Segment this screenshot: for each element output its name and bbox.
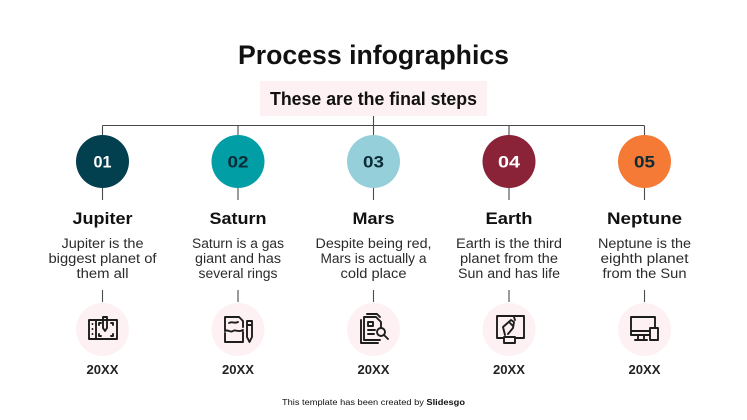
number badge 05 (618, 135, 671, 188)
heading Jupiter: Jupiter (72, 209, 133, 228)
number badge 03 (347, 135, 400, 188)
heading Mars: Mars (352, 209, 394, 228)
step 02: Saturn (192, 135, 284, 377)
icon: drawing tablet (76, 303, 129, 356)
description Saturn: giant and has (195, 251, 281, 266)
description Mars (316, 236, 432, 281)
number badge 04: 04 (498, 152, 521, 172)
year: 20XX (628, 362, 661, 377)
icon: paper and pencil (212, 303, 264, 356)
number badge 02: 02 (228, 152, 248, 172)
year: 20XX (493, 362, 525, 377)
step 05: Neptune (598, 135, 691, 377)
step 01: Jupiter (48, 135, 157, 377)
description Saturn: Saturn is a gas (192, 236, 284, 251)
description Jupiter: biggest planet of (48, 251, 157, 266)
description Jupiter: Jupiter is the (62, 236, 144, 251)
step 03: Mars (316, 135, 432, 377)
footer credit: This template has been created by Slidesgo (282, 397, 465, 407)
number badge 01: 01 (94, 152, 112, 172)
year: 20XX (358, 362, 390, 377)
description Neptune (598, 236, 691, 281)
heading Earth: Earth (486, 209, 532, 228)
connector tree (102, 116, 644, 302)
heading Neptune: Neptune (607, 209, 682, 228)
description Saturn: several rings (198, 266, 278, 281)
description Earth: Sun and has life (458, 266, 560, 281)
description Jupiter: them all (76, 266, 128, 281)
number badge 03: 03 (363, 152, 384, 172)
step 04: Earth (456, 135, 562, 377)
subtitle callout (260, 81, 487, 116)
description Earth: planet from the (460, 251, 558, 266)
description Neptune: from the Sun (602, 266, 686, 281)
number badge 01 (76, 135, 129, 188)
number badge 05: 05 (634, 152, 655, 172)
description Neptune: eighth planet (600, 251, 689, 266)
number badge 04 (482, 135, 536, 188)
heading Saturn: Saturn (210, 209, 266, 228)
title: Process infographics (238, 40, 509, 70)
description Mars: cold place (340, 266, 406, 281)
description Neptune: Neptune is the (598, 236, 691, 251)
description Mars: Mars is actually a (320, 251, 427, 266)
year: 20XX (222, 362, 254, 377)
number badge 02 (212, 135, 264, 188)
icon: computer and tablet (618, 303, 671, 356)
description Earth (456, 236, 562, 281)
description Saturn (192, 236, 284, 281)
year: 20XX (86, 362, 119, 377)
description Jupiter (48, 236, 157, 281)
description Earth: Earth is the third (456, 236, 562, 251)
icon: document search (347, 303, 400, 356)
subtitle callout: These are the final steps (270, 89, 477, 109)
icon: pen on screen (482, 303, 536, 356)
description Mars: Despite being red, (316, 236, 432, 251)
